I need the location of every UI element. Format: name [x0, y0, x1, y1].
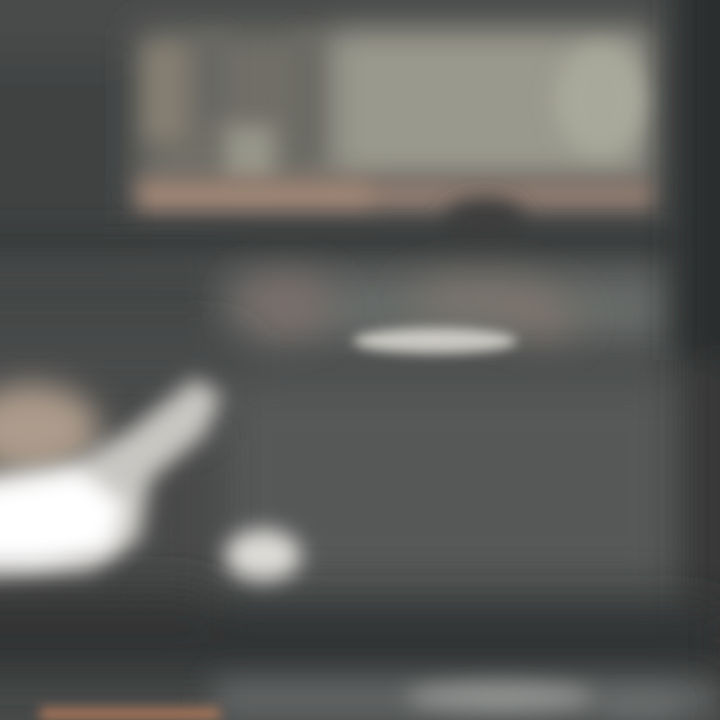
white object with raised arm [0, 378, 222, 585]
bottom grey strip [215, 680, 720, 720]
orange sliver, bottom left [40, 708, 220, 720]
tan shape, bottom left [0, 384, 100, 476]
window area [138, 28, 653, 183]
bottom dark band [0, 590, 720, 673]
mid grey band [0, 265, 670, 355]
window detail streaks [145, 35, 645, 180]
white blob [225, 529, 301, 583]
bottom light highlights [405, 683, 680, 715]
pink reflection [240, 279, 575, 334]
dark horizon band [0, 198, 680, 258]
upper wall, dark [0, 0, 720, 260]
white basin highlight [353, 328, 517, 354]
right dark column [675, 0, 720, 720]
lower counter [0, 340, 680, 588]
dark surround of white object [150, 440, 210, 590]
window horizon: pink band [135, 178, 655, 212]
